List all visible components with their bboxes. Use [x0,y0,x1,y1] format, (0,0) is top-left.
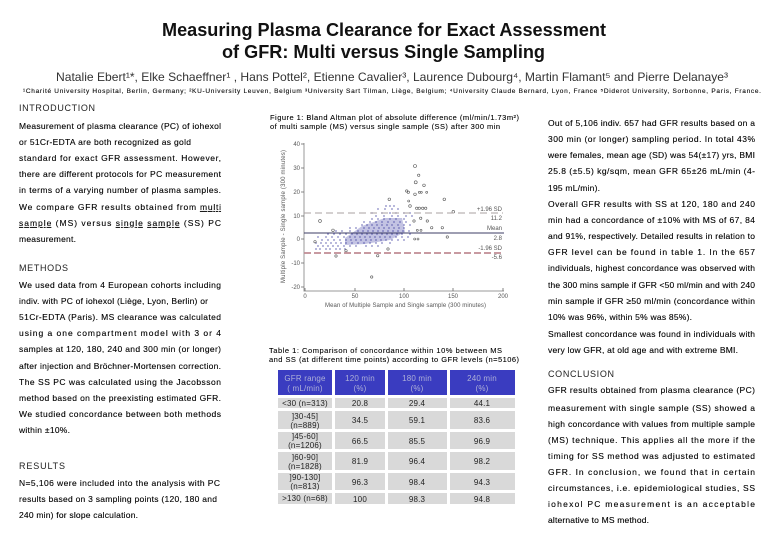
table row: 30-45: (n=889) [290,421,320,430]
panel: methods [18,263,221,435]
text block: cohort description: 300 min (or longer) sampling period. In total 43% [548,134,755,144]
text block: conclusion: (MS) technique. This applies all the more if the [548,435,755,445]
table row: 45-60 [278,432,515,450]
table row: 30-45: 83.6 [474,416,491,425]
table row: under 30: 44.1 [474,399,491,408]
table row: under 30 [278,398,515,408]
x axis label: Mean of Multiple Sample and Single sample (300 minutes) [325,303,486,309]
table row: 45-60: ]45-60] [292,432,318,441]
panel: introduction [19,103,222,244]
text block: introduction: We compare GFR results obtained from multi [19,202,221,212]
table row: 45-60: (n=1206) [288,441,322,450]
text block: methods: The SS PC was calculated using the Jacobsson [19,377,221,387]
text block: results intro: results based on 3 sampling points (120, 180 and [19,494,217,504]
scatter points: dense cloud [316,206,412,249]
reference line labels: Mean [487,226,502,232]
figure caption: Figure 1: Bland Altman plot of absolute difference (ml/min/1.73m²) [270,113,520,122]
y axis tick labels: 30 [293,166,301,172]
text block: cohort description: 25.8 (±5.5) kg/sqm, mean GFR 65±26 mL/min (4- [548,166,755,176]
y axis tick labels: -10 [291,261,301,267]
text block: conclusion: timing for SS method was adjusted to estimated [548,451,755,461]
text block: introduction: Measurement of plasma clearance (PC) of iohexol [19,121,221,131]
table row: 60-90: ]60-90] [292,453,318,462]
x axis tick labels: 50 [352,294,359,300]
table caption [269,346,520,364]
text block: introduction: measurement. [19,234,76,244]
mean line [304,232,504,234]
reference line labels: 2.8 [494,236,503,242]
x axis tick labels: 150 [448,294,459,300]
text block: introduction: there are different protocols for PC measurement [19,169,222,179]
text block: conclusion: GFR. In conclusion, we found that in certain [548,467,755,477]
text block: overall results [548,199,755,322]
plot axes [301,143,504,291]
y axis label: Multiple Sample - Single sample (300 minutes) [281,150,287,283]
table row: 90-130: 94.3 [474,478,491,487]
text block: methods: We studied concordance between both methods [19,409,221,419]
y axis tick labels [291,142,301,291]
text block: methods [18,280,221,435]
table row: over 130: 98.3 [409,495,426,504]
panel: results (left column) [19,461,220,520]
text block: introduction [19,121,222,244]
reference line labels: -5.6 [492,255,503,261]
table row: under 30: <30 (n=313) [282,399,328,408]
table row: 30-45: 34.5 [352,416,369,425]
text block: results intro: N=5,106 were included into the analysis with PC [19,478,220,488]
y axis tick labels: 20 [293,190,301,196]
text block: methods: 51Cr-EDTA (Paris). MS clearance was calculated [19,312,221,322]
text block: cohort description: 195 mL/min). [548,183,600,193]
table row: over 130: 94.8 [474,495,491,504]
text block: overall results: individuals, highest concordance was observed with [548,263,755,273]
text block: smallest concordance: very low GFR, at old age and with extreme BMI. [548,345,738,355]
text block: methods: after injection and Bröchner-Mortensen correction. [19,361,221,371]
text block: smallest concordance [548,329,755,355]
heading: results: RESULTS [19,461,65,471]
text block: overall results: min sample if GFR ≥50 ml/min (concordance within [548,296,755,306]
chart: Bland-Altman scatter plot [281,142,509,309]
table: concordance by GFR level [278,370,515,504]
reference line labels: +1.96 SD [477,207,503,213]
y axis tick labels: 10 [293,214,301,220]
table row: under 30: 29.4 [409,399,426,408]
table row: 30-45: ]30-45] [292,412,318,421]
text block: overall results: 10% was 96%, within 5% was 85%). [548,312,692,322]
text block: cohort description: were females, mean age (SD) was 54(±17) yrs, BMI [547,150,755,160]
text block: smallest concordance: Smallest concordance was found in individuals with [548,329,755,339]
x axis tick labels: 0 [303,294,307,300]
table row: 60-90: 96.4 [409,457,426,466]
x axis tick labels: 100 [399,294,410,300]
table row: 45-60: 66.5 [352,437,369,446]
title: Measuring Plasma Clearance for Exact Assessment [162,19,606,40]
text block: overall results: Overall GFR results with SS at 120, 180 and 240 [548,199,755,209]
heading: introduction: INTRODUCTION [19,103,95,113]
text block: conclusion: alternative to MS method. [548,515,649,525]
table caption: Table 1: Comparison of concordance within 10% between MS [269,346,502,355]
table header: ( mL/min) [287,384,323,393]
table header: 120 min [345,374,375,383]
text block: introduction: standard for exact GFR assessment. However, [19,153,221,163]
table row: 90-130: 96.3 [352,478,369,487]
text block: overall results: the 300 mins sample if GFR <50 ml/min and with 240 [548,280,755,290]
table header: (%) [353,384,367,393]
text block: cohort description: Out of 5,106 indiv. 657 had GFR results based on a [548,118,755,128]
panel: results (right column) [547,118,755,355]
table header: (%) [410,384,424,393]
text block: conclusion [548,385,755,525]
authors: Natalie Ebert¹*, Elke Schaeffner¹ , Hans Pottel², Etienne Cavalier³, Laurence Dubourg⁴, Martin Flamant⁵ and Pierre Delanaye³ [56,70,728,84]
title: of GFR: Multi versus Single Sampling [222,41,545,62]
text block: conclusion: measurement with single sample (SS) showed a [548,403,755,413]
table header: (%) [475,384,489,393]
table row: 60-90: 98.2 [474,457,491,466]
text block: overall results: min had a concordance of ±10% with MS of 67, 84 [548,215,755,225]
x axis tick labels [303,294,509,300]
text block: conclusion: GFR results obtained from plasma clearance (PC) [548,385,755,395]
text block: results intro [19,478,220,520]
y axis tick labels: 40 [293,142,301,148]
table row: over 130 [278,493,515,504]
table row: 45-60: 85.5 [409,437,426,446]
table row: 30-45 [278,411,515,430]
table row: under 30: 20.8 [352,399,369,408]
reference line labels: -1.96 SD [478,246,503,252]
text block: conclusion: circumstances, i.e. epidemiological studies, SS [548,483,755,493]
table row: 30-45: 59.1 [409,416,426,425]
x axis tick labels: 200 [498,294,509,300]
table caption: and SS (at different time points) according to GFR levels (n=5106) [269,355,520,364]
table row: 60-90 [278,452,515,471]
text block: methods: using a one compartment model with 3 or 4 [19,328,221,338]
text block: overall results: GFR level can be found in table 1. In the 657 [548,247,755,257]
table header [278,370,515,395]
y axis tick labels: 0 [297,237,301,243]
table header: 180 min [402,374,432,383]
text block: cohort description [547,118,755,193]
table header: GFR range [284,374,326,383]
text block: introduction: sample (MS) versus single sample (SS) PC [19,218,221,228]
text block: methods: indiv. with PC of iohexol (Liège, Lyon, Berlin) or [19,296,208,306]
heading: methods: METHODS [19,263,68,273]
table header: 240 min [467,374,497,383]
table row: 90-130: (n=813) [290,482,320,491]
text block: conclusion: high concordance with values from multiple sample [548,419,755,429]
text block: introduction: in terms of a varying number of plasma samples. [19,185,221,195]
lower limit line -1.96 SD [304,252,503,254]
text block: methods: samples at 120, 180, 240 and 300 min (or longer) [19,344,221,354]
table row: over 130: 100 [353,495,367,504]
text block: overall results: and 91%, respectively. Detailed results in relation to [548,231,755,241]
table row: 45-60: 96.9 [474,437,491,446]
table row: 90-130 [278,473,515,491]
scatter points: outliers [314,164,455,278]
heading: conclusion: CONCLUSION [548,369,614,379]
upper limit line +1.96 SD [304,212,503,214]
table row: 90-130: 98.4 [409,478,426,487]
text block: introduction: or 51Cr-EDTA are both recognized as gold [19,137,191,147]
affiliations: ¹Charité University Hospital, Berlin, Germany; ²KU-University Leuven, Belgium ³University Sart Tilman, Liège, Belgium; ⁴University Claude Bernard, Lyon, France ⁵Diderot University, Sorbonne, Paris, France. [23,88,761,95]
text block: methods: method based on the preexisting estimated GFR. [19,393,221,403]
reference line labels: 11.2 [491,216,503,222]
text block: conclusion: iohexol PC measurement is an acceptable [548,499,755,509]
table row: 60-90: (n=1828) [288,462,322,471]
text block: results intro: 240 min) for slope calculation. [19,510,138,520]
text block: methods: within ±10%. [18,425,70,435]
y axis tick labels: -20 [291,285,301,291]
title [162,19,606,62]
table row: 90-130: ]90-130] [290,473,320,482]
table row: over 130: >130 (n=68) [282,494,328,503]
panel: conclusion [548,369,755,525]
figure caption: of multi sample (MS) versus single sample (SS) after 300 min [270,122,500,131]
figure caption [270,113,520,131]
text block: methods: We used data from 4 European cohorts including [19,280,221,290]
reference line labels [477,207,503,261]
table row: 60-90: 81.9 [352,457,369,466]
